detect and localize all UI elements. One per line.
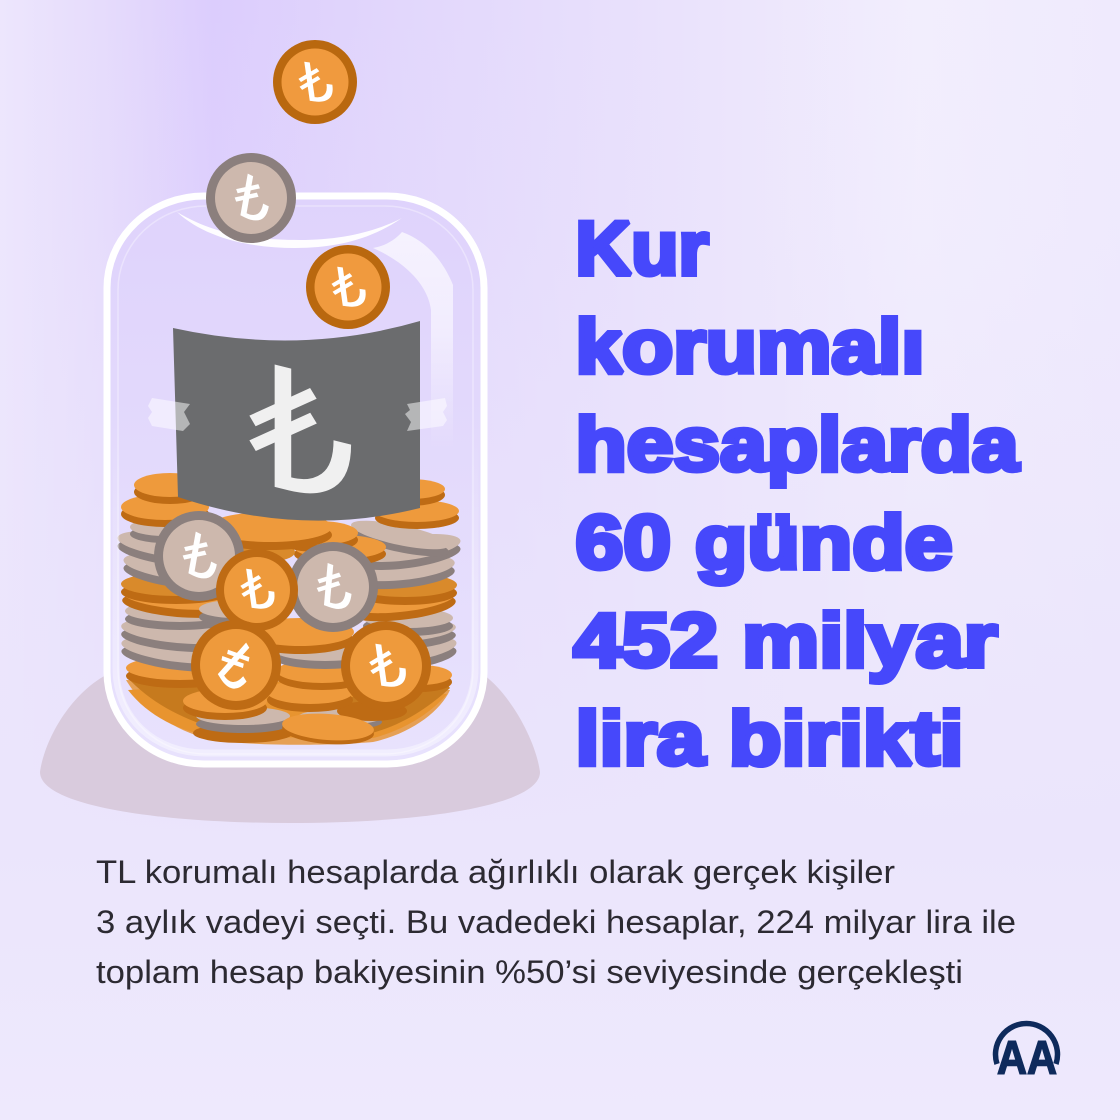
coin orange lower left bbox=[191, 620, 281, 710]
title: 60 günde bbox=[576, 500, 952, 586]
bottom orange mass bbox=[126, 680, 450, 745]
tape left bbox=[148, 398, 190, 431]
coins in jar bbox=[154, 511, 431, 711]
coin orange centre bbox=[216, 549, 298, 631]
banknote bbox=[173, 321, 420, 547]
falling coin orange top: ₺ bbox=[294, 50, 338, 117]
left stack bbox=[126, 664, 234, 688]
coin orange lower left: ₺ bbox=[204, 626, 269, 709]
coin pile bbox=[116, 473, 462, 747]
big lira symbol: ₺ bbox=[249, 326, 355, 547]
title: hesaplarda bbox=[576, 402, 1019, 488]
coin orange centre: ₺ bbox=[236, 557, 280, 624]
coin silver right: ₺ bbox=[314, 548, 356, 629]
body text: TL korumalı hesaplarda ağırlıklı olarak gerçek kişiler bbox=[96, 854, 895, 890]
falling coin orange lower bbox=[306, 245, 390, 329]
jar shadow pedestal bbox=[40, 675, 540, 823]
jar glass outline and highlights bbox=[107, 196, 484, 764]
title: 452 milyar bbox=[574, 598, 998, 684]
coin silver right bbox=[288, 542, 378, 632]
body text bbox=[96, 854, 1016, 990]
coin orange lower right bbox=[341, 621, 431, 711]
logo: AA: AA bbox=[997, 1031, 1057, 1084]
falling coin silver bbox=[206, 153, 296, 243]
coin orange lower right: ₺ bbox=[364, 631, 412, 703]
title bbox=[574, 206, 1019, 782]
title: korumalı bbox=[576, 304, 924, 390]
coin silver left bbox=[154, 511, 244, 601]
falling coin orange top bbox=[273, 40, 357, 124]
right stack bbox=[388, 672, 452, 692]
jar shine bbox=[373, 232, 453, 450]
body text: 3 aylık vadeyi seçti. Bu vadedeki hesaplar, 224 milyar lira ile bbox=[96, 904, 1016, 940]
falling coin orange lower: ₺ bbox=[327, 255, 371, 322]
falling coin silver: ₺ bbox=[230, 158, 276, 242]
glass jar body bbox=[107, 196, 484, 764]
tape right bbox=[405, 398, 447, 431]
title: lira birikti bbox=[576, 696, 964, 782]
jar mouth crescent bbox=[177, 212, 402, 248]
centre stack bbox=[193, 723, 293, 743]
body text: toplam hesap bakiyesinin %50’si seviyesinde gerçekleşti bbox=[96, 954, 963, 990]
title: Kur bbox=[576, 206, 708, 292]
coin silver left: ₺ bbox=[178, 516, 224, 600]
